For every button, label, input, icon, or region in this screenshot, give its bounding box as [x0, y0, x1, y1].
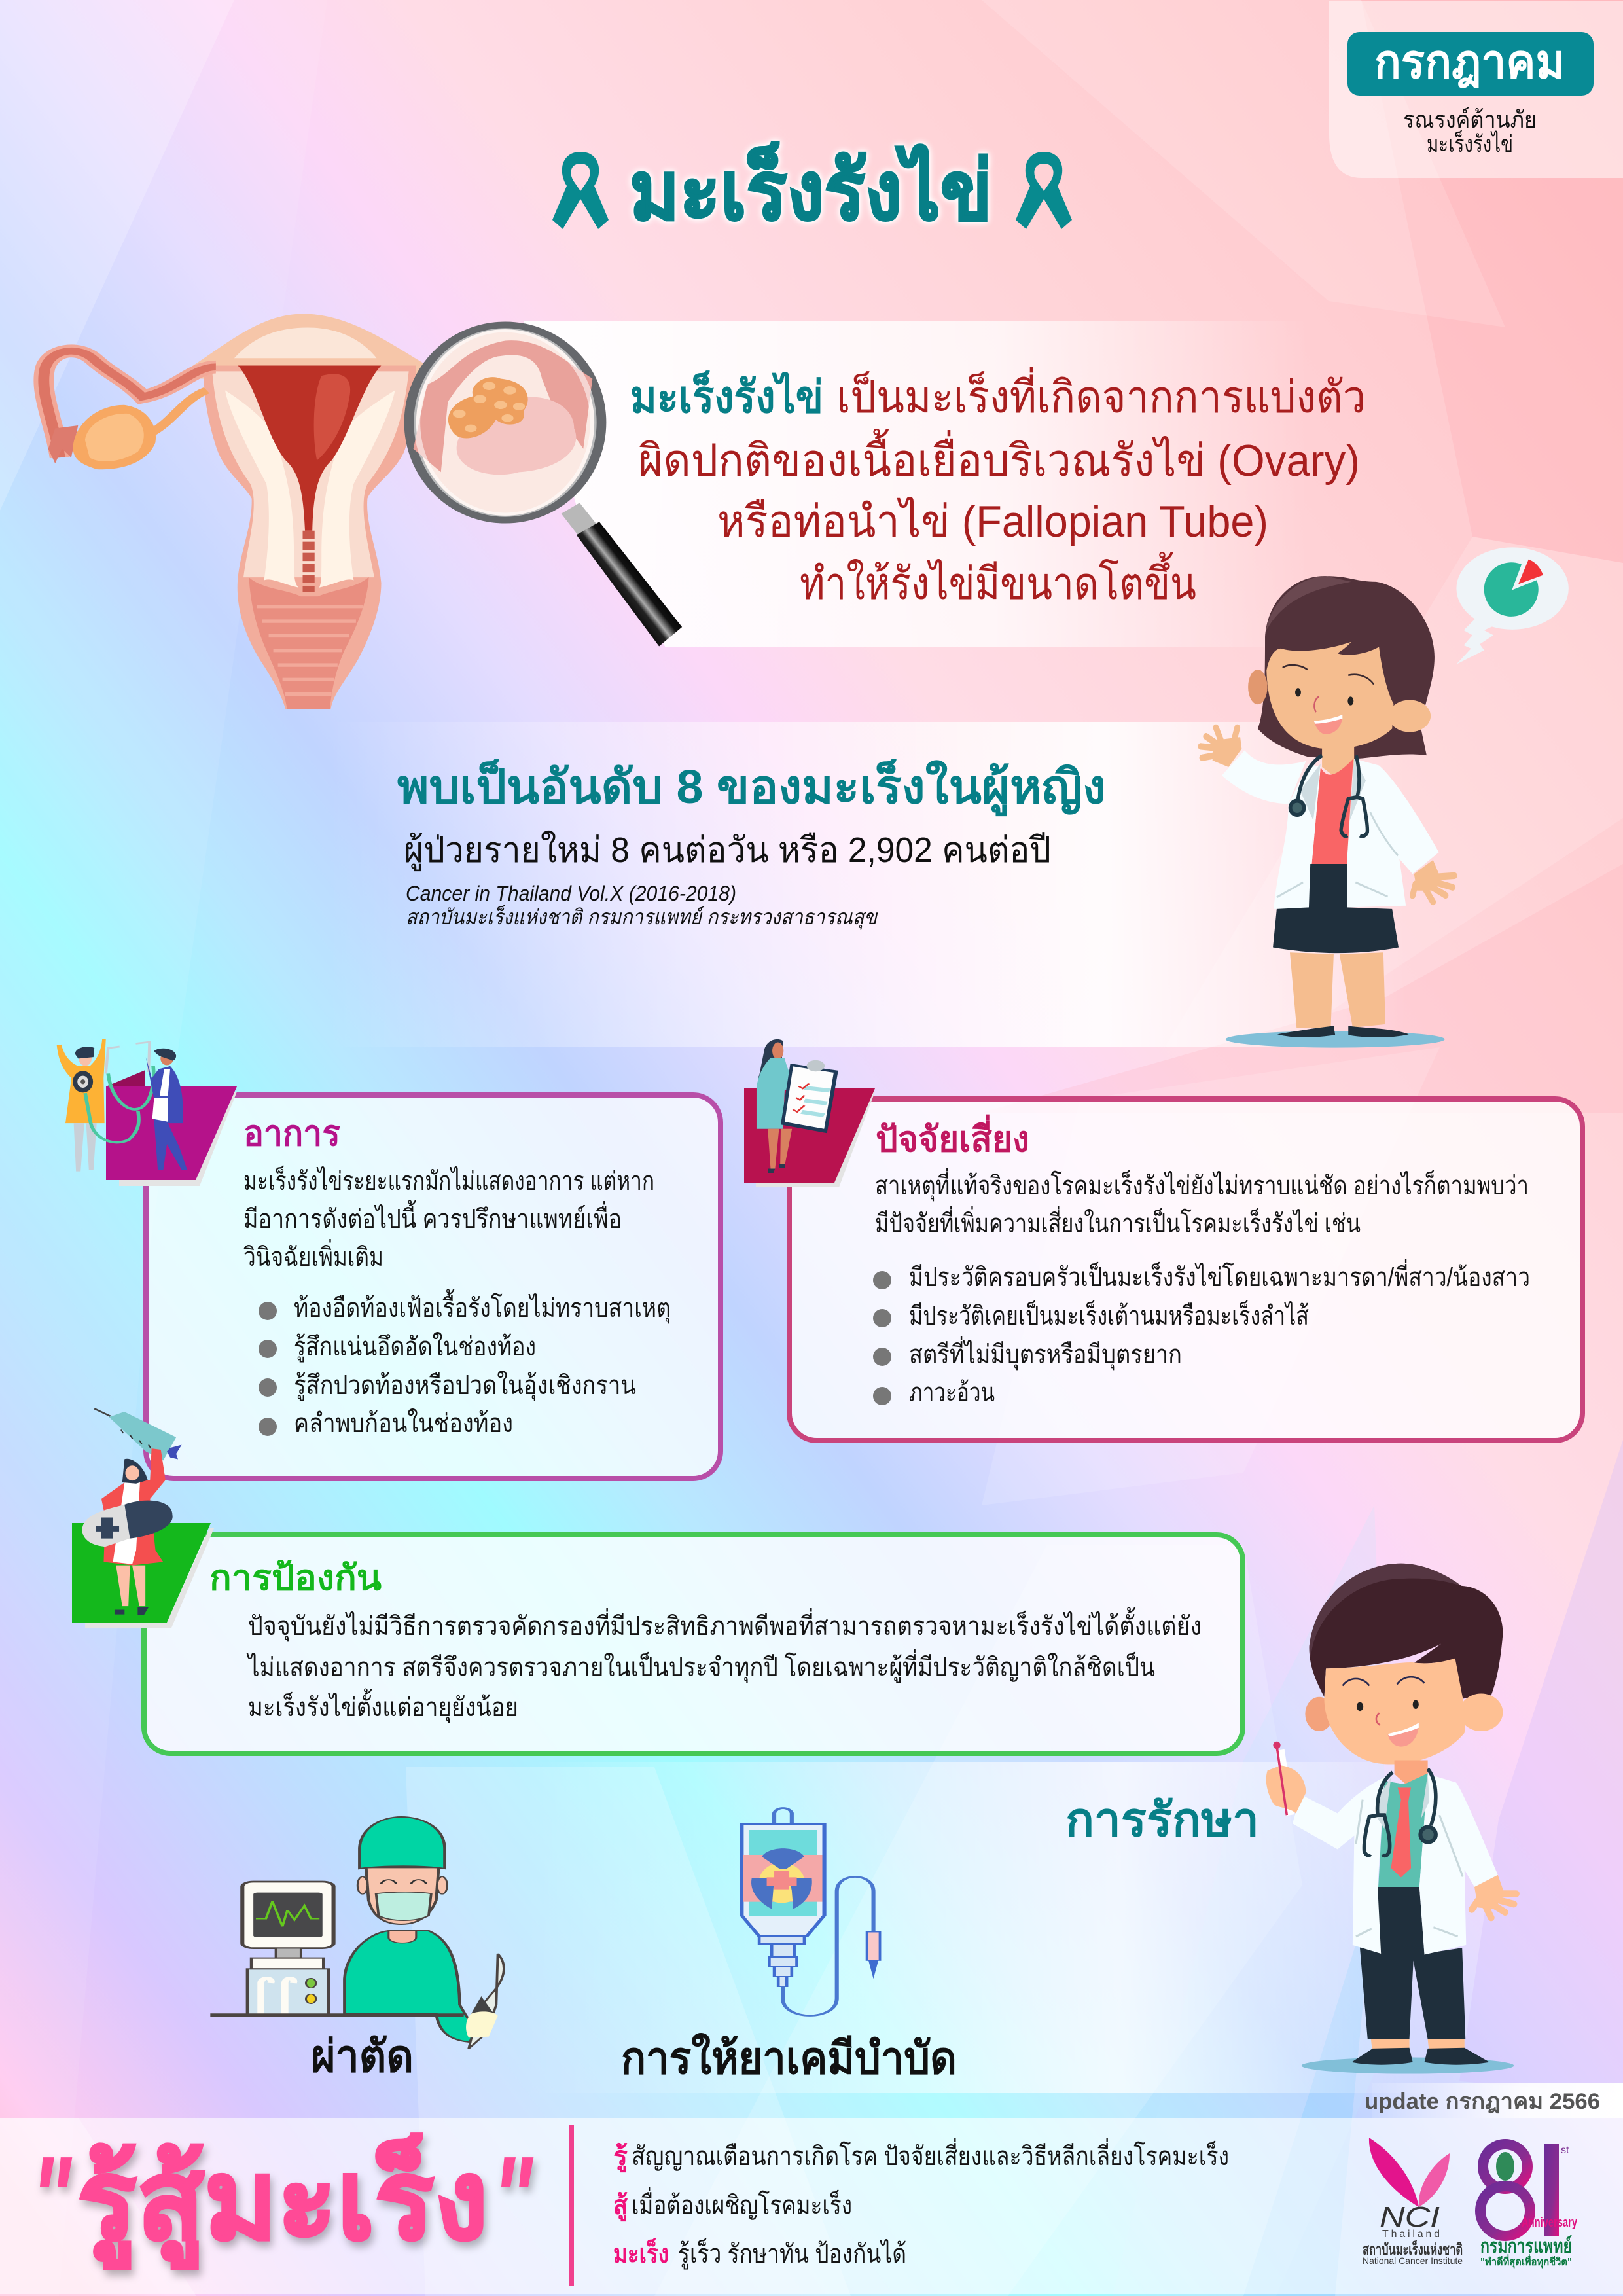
logo: national cancer institute: สถาบันมะเร็งแห่งชาติ: [1363, 2240, 1463, 2259]
illustration: woman with clipboard: [757, 1039, 838, 1173]
card heading: อาการ: [243, 1114, 340, 1153]
tab: [106, 1086, 237, 1180]
statistics text: [397, 759, 1106, 930]
card intro text: [875, 1168, 1529, 1238]
symptom list: ท้องอืดท้องเฟ้อเรื้อรังโดยไม่ทราบสาเหตุ: [294, 1289, 671, 1324]
symptom list: รู้สึกแน่นอึดอัดในช่องท้อง: [294, 1331, 536, 1362]
card heading: ปัจจัยเสี่ยง: [876, 1114, 1029, 1159]
slogan: ": [31, 2132, 73, 2264]
tab: [744, 1088, 875, 1183]
tab shadow: [85, 1528, 214, 1628]
slogan details: สัญญาณเตือนการเกิดโรค ปัจจัยเสี่ยงและวิธีหลีกเลี่ยงโรคมะเร็ง: [632, 2138, 1229, 2171]
definition text: เป็นมะเร็งที่เกิดจากการแบ่งตัว: [836, 367, 1366, 422]
heading text: มะเร็งรังไข่: [630, 141, 992, 237]
risk list: [873, 1259, 1530, 1407]
logo: national cancer institute: Thailand: [1382, 2229, 1440, 2240]
slogan: ": [492, 2132, 534, 2264]
month badge: กรกฎาคม: [1374, 36, 1565, 88]
slogan details: มะเร็ง: [613, 2237, 669, 2269]
card text: ไม่แสดงอาการ สตรีจึงควรตรวจภายในเป็นประจำทุกปี โดยเฉพาะผู้ที่มีประวัติญาติใกล้ชิดเป็น: [246, 1649, 1155, 1683]
card intro text: มีปัจจัยที่เพิ่มความเสี่ยงในการเป็นโรคมะเร็งรังไข่ เช่น: [875, 1206, 1361, 1238]
slogan details: สู้: [613, 2191, 628, 2221]
card frame: [144, 1535, 1243, 1753]
definition text: ทำให้รังไข่มีขนาดโตขึ้น: [800, 552, 1196, 609]
card intro text: [243, 1165, 654, 1272]
treatment heading: การรักษา: [1065, 1794, 1259, 1846]
slogan: รู้สู้มะเร็ง: [77, 2134, 488, 2269]
card heading: การป้องกัน: [209, 1558, 382, 1598]
logo: 81st anniversary: "ทำดีที่สุดเพื่อทุกชีวิต": [1480, 2254, 1572, 2269]
card frame: [146, 1095, 721, 1479]
card intro text: วินิจฉัยเพิ่มเติม: [243, 1239, 383, 1272]
label: surgery: ผ่าตัด: [311, 2032, 414, 2081]
slogan details: [613, 2138, 1229, 2269]
statistics text: Cancer in Thailand Vol.X (2016-2018): [406, 882, 736, 905]
slogan details: รู้เร็ว รักษาทัน ป้องกันได้: [678, 2238, 906, 2269]
campaign text: รณรงค์ต้านภัย: [1403, 106, 1537, 133]
panel: risk factors: [744, 1039, 1582, 1441]
risk list: มีประวัติเคยเป็นมะเร็งเต้านมหรือมะเร็งลำไส้: [909, 1300, 1309, 1331]
illustration: woman with pill: [82, 1448, 173, 1615]
tab shadow: [119, 1092, 237, 1186]
icon: lens: [410, 325, 600, 520]
label: chemotherapy: การให้ยาเคมีบำบัด: [621, 2032, 957, 2083]
logo: national cancer institute: [1363, 2138, 1463, 2266]
tab shadow: [756, 1092, 875, 1187]
logo: 81st anniversary: [1480, 2144, 1578, 2269]
logo: 81st anniversary: กรมการแพทย์: [1480, 2235, 1572, 2257]
speech bubble with pie chart: [1456, 547, 1569, 664]
statistics text: สถาบันมะเร็งแห่งชาติ กรมการแพทย์ กระทรวงสาธารณสุข: [406, 905, 878, 930]
icon: syringe: [94, 1408, 182, 1460]
panel: symptoms: [57, 1039, 721, 1479]
card frame: [789, 1099, 1582, 1441]
update note: [1364, 2083, 1623, 2118]
definition text: หรือท่อนำไข่ (Fallopian Tube): [717, 496, 1268, 547]
icon: handle: [562, 503, 682, 646]
illustration: uterus and ovary: [44, 314, 425, 709]
slogan details: รู้: [613, 2142, 628, 2172]
risk list: สตรีที่ไม่มีบุตรหรือมีบุตรยาก: [909, 1336, 1182, 1371]
update note: update กรกฎาคม 2566: [1364, 2089, 1600, 2114]
icon: right ribbon: [1016, 152, 1072, 229]
symptom list: [259, 1289, 671, 1438]
statistics text: พบเป็นอันดับ 8 ของมะเร็งในผู้หญิง: [397, 759, 1106, 817]
symptom list: รู้สึกปวดท้องหรือปวดในอุ้งเชิงกราน: [294, 1370, 636, 1401]
definition text: มะเร็งรังไข่: [630, 370, 823, 422]
icon: chemotherapy IV bag: [741, 1808, 880, 2016]
card text: [246, 1607, 1202, 1723]
illustration: magnifying glass: [410, 325, 682, 646]
icon: left ribbon: [552, 152, 609, 229]
footer panel: [0, 2118, 1623, 2294]
statistics text: ผู้ป่วยรายใหม่ 8 คนต่อวัน หรือ 2,902 คนต่อปี: [404, 830, 1051, 871]
card intro text: มะเร็งรังไข่ระยะแรกมักไม่แสดงอาการ แต่หาก: [243, 1165, 654, 1196]
tab: [72, 1523, 211, 1623]
logo: national cancer institute: NCI: [1380, 2201, 1440, 2233]
illustration: female doctor: [1201, 547, 1569, 1048]
month badge: [1347, 32, 1594, 96]
campaign text: [1403, 106, 1537, 157]
risk list: ภาวะอ้วน: [909, 1378, 995, 1407]
month badge panel: [1329, 1, 1623, 178]
card intro text: มีอาการดังต่อไปนี้ ควรปรึกษาแพทย์เพื่อ: [243, 1200, 622, 1234]
definition text: ผิดปกติของเนื้อเยื่อบริเวณรังไข่ (Ovary): [638, 429, 1360, 486]
icon: surgeon with monitor: [210, 1817, 504, 2049]
logo: 81st anniversary: Anniversary: [1522, 2215, 1578, 2230]
slogan details: เมื่อต้องเผชิญโรคมะเร็ง: [632, 2187, 852, 2220]
illustration: male doctor: [1266, 1564, 1516, 2074]
logo: 81st anniversary: st: [1561, 2145, 1569, 2156]
title: [552, 141, 1072, 237]
card text: ปัจจุบันยังไม่มีวิธีการตรวจคัดกรองที่มีประสิทธิภาพดีพอที่สามารถตรวจหามะเร็งรังไข่ได้ตั้งแต่ยัง: [248, 1607, 1202, 1642]
symptom list: คลำพบก้อนในช่องท้อง: [294, 1408, 513, 1438]
panel: prevention: [72, 1408, 1243, 1753]
card text: มะเร็งรังไข่ตั้งแต่อายุยังน้อย: [248, 1688, 518, 1723]
illustration: doctors with stethoscope: [57, 1039, 187, 1172]
logo: national cancer institute: National Cancer Institute: [1363, 2255, 1463, 2266]
campaign text: มะเร็งรังไข่: [1427, 129, 1513, 157]
definition text: [630, 367, 1366, 609]
icon: tab cube side: [106, 1070, 145, 1086]
